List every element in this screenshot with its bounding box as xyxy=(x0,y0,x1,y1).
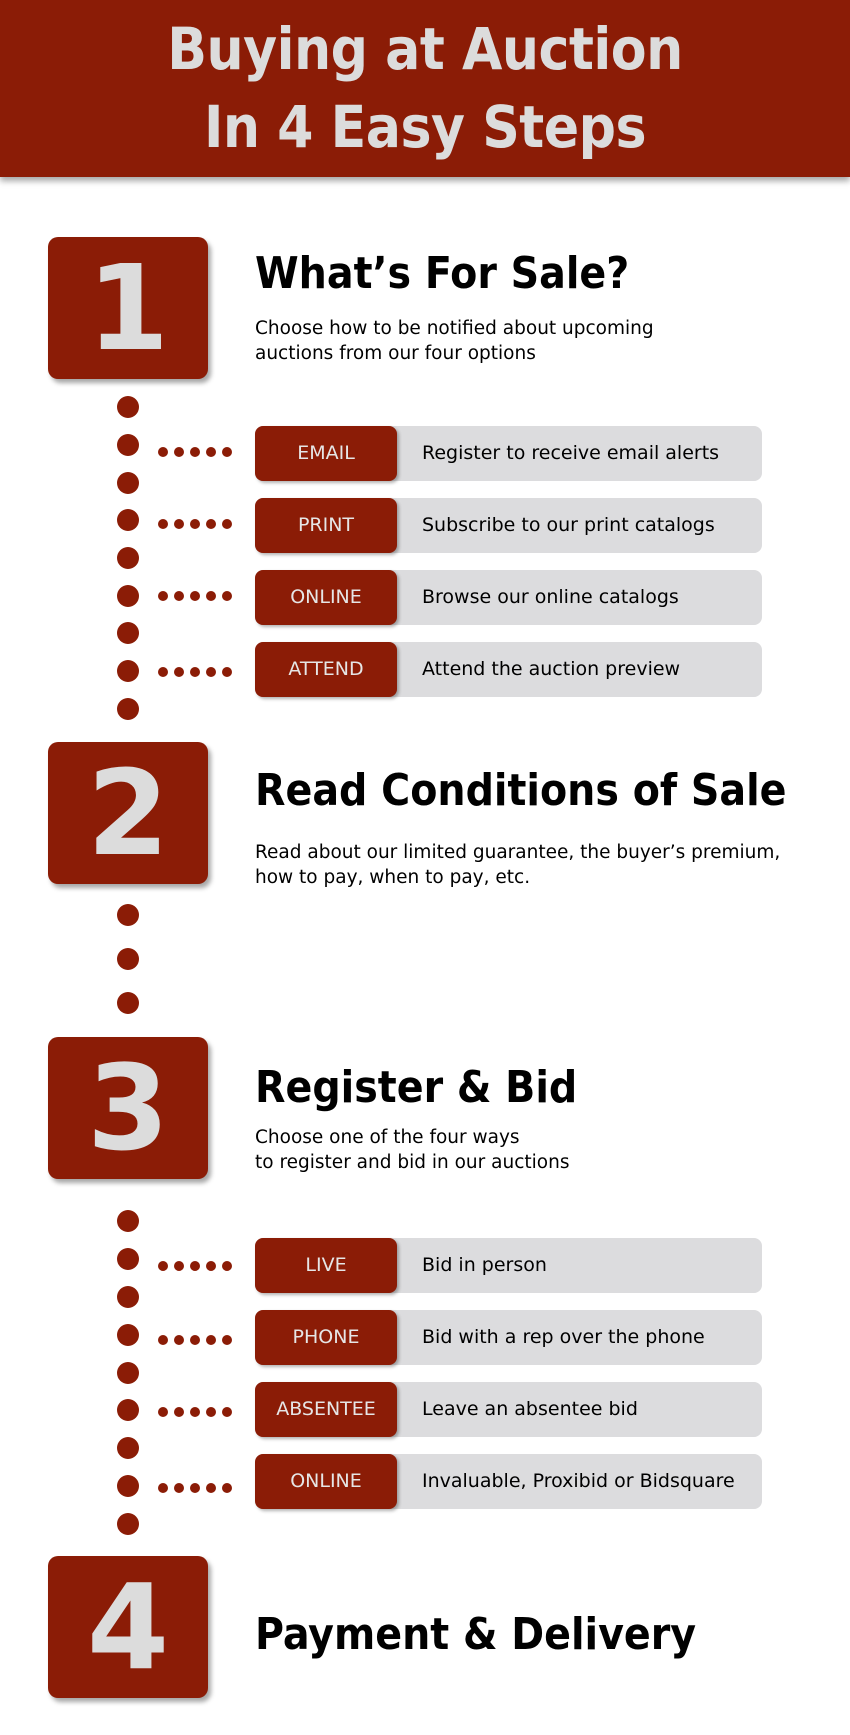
title: In 4 Easy Steps xyxy=(204,93,646,161)
connector dots 2 xyxy=(117,904,139,1014)
row: online bidding xyxy=(255,1454,762,1509)
step 2 box xyxy=(48,742,208,884)
step 3 description: to register and bid in our auctions xyxy=(255,1152,569,1173)
row: phone: PHONE xyxy=(293,1326,359,1348)
step 1 heading: What’s For Sale? xyxy=(255,248,629,299)
step 1 description xyxy=(255,318,654,364)
row: attend: Attend the auction preview xyxy=(422,658,680,680)
connector dots 3 xyxy=(117,1210,139,1535)
leader dots 3 xyxy=(158,1261,232,1493)
step 1 description: Choose how to be notified about upcoming xyxy=(255,318,654,339)
row: absentee xyxy=(255,1382,762,1437)
row: email: EMAIL xyxy=(297,442,355,464)
row: online: Browse our online catalogs xyxy=(422,586,679,608)
row: print xyxy=(255,498,762,553)
row: absentee: Leave an absentee bid xyxy=(422,1398,638,1420)
row: online xyxy=(255,570,762,625)
leader dots xyxy=(158,447,232,677)
step 2 description xyxy=(255,842,780,888)
row: online: ONLINE xyxy=(290,586,362,608)
step 3 box xyxy=(48,1037,208,1179)
step 2 description: how to pay, when to pay, etc. xyxy=(255,867,530,888)
row: email: Register to receive email alerts xyxy=(422,442,719,464)
step 1 box: 1 xyxy=(87,239,169,377)
row: online bidding: Invaluable, Proxibid or Bidsquare xyxy=(422,1470,735,1492)
step 3 description: Choose one of the four ways xyxy=(255,1127,520,1148)
step 4 heading: Payment & Delivery xyxy=(255,1609,696,1660)
row: live: Bid in person xyxy=(422,1254,547,1276)
row: email xyxy=(255,426,762,481)
row: phone: Bid with a rep over the phone xyxy=(422,1326,705,1348)
row: attend: ATTEND xyxy=(288,658,364,680)
step 3 heading: Register & Bid xyxy=(255,1062,577,1113)
row: online bidding: ONLINE xyxy=(290,1470,362,1492)
step 3 box: 3 xyxy=(87,1039,169,1177)
title xyxy=(0,0,850,177)
connector dots 1 xyxy=(117,396,139,720)
step 4 box xyxy=(48,1556,208,1698)
step 4 box: 4 xyxy=(87,1558,169,1696)
row: absentee: ABSENTEE xyxy=(276,1398,376,1420)
row: live xyxy=(255,1238,762,1293)
row: print: Subscribe to our print catalogs xyxy=(422,514,715,536)
step 2 description: Read about our limited guarantee, the buyer’s premium, xyxy=(255,842,780,863)
step 3 description xyxy=(255,1127,569,1173)
row: live: LIVE xyxy=(305,1254,347,1276)
row: print: PRINT xyxy=(298,514,354,536)
row: phone xyxy=(255,1310,762,1365)
step 2 box: 2 xyxy=(87,744,169,882)
step 1 description: auctions from our four options xyxy=(255,343,536,364)
step 2 heading: Read Conditions of Sale xyxy=(255,765,787,816)
row: attend xyxy=(255,642,762,697)
title: Buying at Auction xyxy=(167,15,683,83)
step 1 box xyxy=(48,237,208,379)
